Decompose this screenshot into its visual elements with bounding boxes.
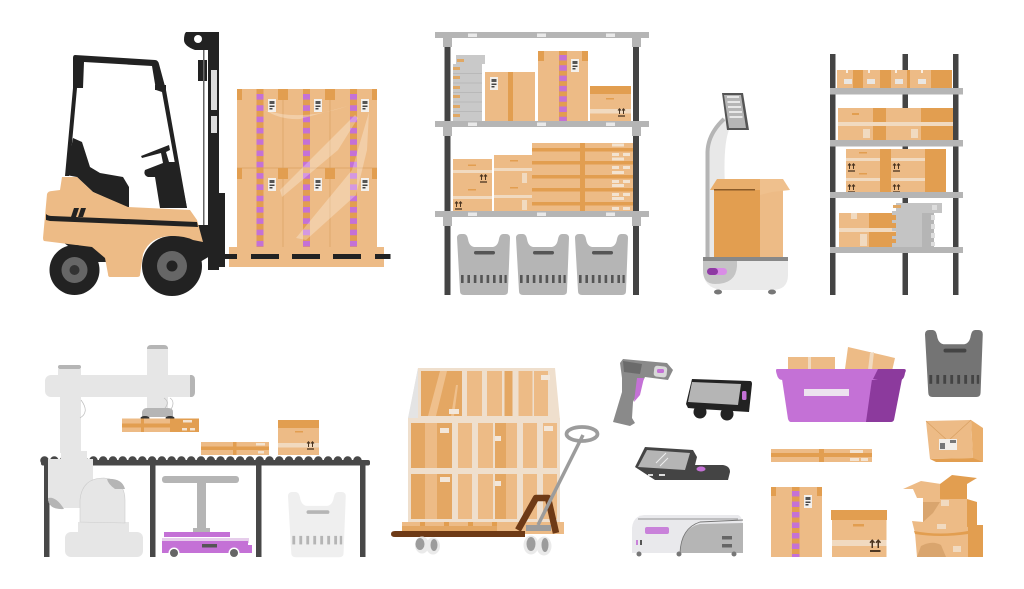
hand truck wheels — [415, 536, 552, 556]
forklift body — [43, 177, 203, 277]
second row boxes — [838, 108, 953, 140]
wrap grey shading — [408, 368, 418, 418]
grey basket 3 — [575, 234, 628, 295]
third row boxes — [846, 149, 946, 192]
middle carton — [923, 498, 977, 529]
grey carton stack — [453, 55, 485, 121]
bottom row of wrapped boxes — [411, 474, 557, 519]
wooden pallet — [402, 522, 564, 534]
shelf boards — [830, 88, 963, 253]
top row of wrapped boxes — [421, 371, 550, 416]
robot pole edge — [708, 119, 724, 257]
handheld mobile computer — [635, 447, 730, 480]
conveyor with robot arm — [41, 345, 370, 558]
white basket — [288, 492, 346, 557]
pallet — [225, 247, 390, 267]
purple mobile robot — [162, 532, 252, 558]
boxes inside tub — [788, 347, 895, 371]
hand truck handle — [526, 427, 598, 528]
shelf uprights — [444, 38, 639, 295]
wide flat box stack — [532, 143, 633, 211]
robot pole light panel — [708, 118, 729, 257]
robot screen — [722, 93, 749, 130]
hand truck fork and frame — [391, 498, 556, 537]
robot base — [703, 257, 788, 294]
lower carton — [912, 521, 983, 557]
damaged open cartons — [903, 475, 983, 557]
conveyor legs — [44, 462, 366, 557]
tub rim dark — [873, 369, 906, 380]
stacked boxes, middle shelf centre — [494, 155, 532, 211]
purple tub with boxes — [776, 347, 906, 422]
tall box with purple tape — [771, 487, 822, 557]
stacked boxes, middle shelf left — [453, 159, 492, 211]
forklift cab frame — [65, 55, 187, 208]
grey carton stack on shelf — [892, 203, 942, 247]
tub dark side — [866, 379, 902, 422]
flat parcel — [771, 449, 872, 462]
lidded box with arrows — [831, 510, 887, 557]
forklift stripe — [46, 208, 198, 227]
conveyor belt — [41, 460, 370, 466]
wrap sides — [408, 368, 560, 420]
robot arm base and elbow — [48, 451, 143, 557]
delivery robot with carton — [703, 93, 790, 294]
middle row of wrapped boxes — [411, 423, 557, 468]
box with purple tape — [538, 51, 588, 121]
dark basket — [925, 330, 983, 397]
wrapped pallet on hand truck — [391, 368, 598, 556]
lidded box on belt — [278, 420, 319, 455]
grey basket 2 — [516, 234, 569, 295]
barcode scanner gun — [613, 359, 673, 426]
forklift rear wheel arch — [60, 225, 210, 262]
robot arm horizontal — [45, 345, 195, 420]
grey basket 1 — [457, 234, 510, 295]
shelf uprights — [830, 54, 958, 295]
tub body — [782, 379, 874, 422]
robot arm column — [58, 365, 81, 453]
flat box on belt — [201, 442, 269, 455]
fourth row boxes — [839, 213, 897, 247]
forklift rear wheel — [50, 245, 100, 295]
shelf boards — [435, 32, 649, 226]
forklift mast — [184, 32, 225, 270]
handheld terminal with wheels — [686, 379, 752, 420]
wrap lower — [408, 418, 560, 523]
small lidded box — [590, 86, 631, 121]
top open flaps — [903, 475, 977, 499]
robot carton — [710, 179, 790, 257]
tub label — [804, 389, 849, 396]
tall shelf with boxes and baskets — [435, 32, 649, 295]
top row boxes — [837, 70, 952, 88]
box with orange tape — [485, 72, 535, 121]
tub rim — [776, 369, 878, 380]
envelope box — [926, 420, 983, 462]
right shelf unit with boxes — [830, 54, 963, 295]
forklift front wheel — [142, 236, 202, 296]
forklift with pallet of boxes — [43, 32, 390, 296]
white warehouse robot — [632, 515, 743, 556]
gripped flat box — [122, 418, 199, 432]
stand table — [162, 476, 239, 532]
boxes on pallet — [237, 89, 377, 247]
